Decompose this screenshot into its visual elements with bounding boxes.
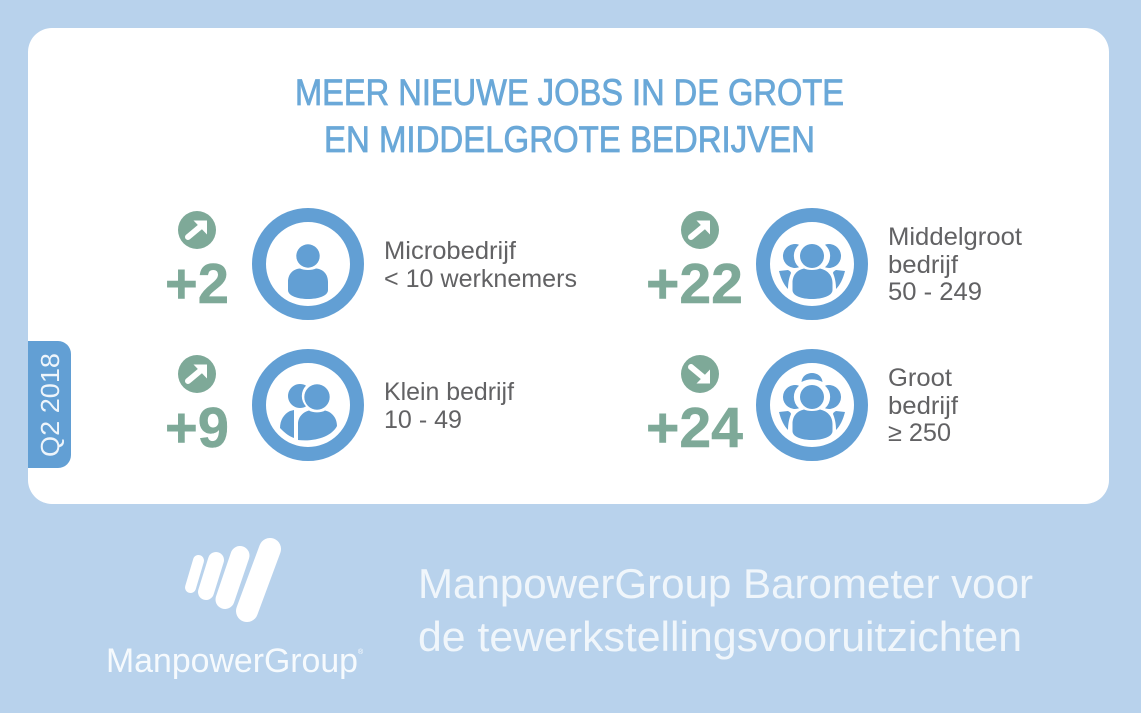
footer text: de tewerkstellingsvooruitzichten bbox=[418, 613, 1022, 660]
icon: logo bars bbox=[190, 549, 270, 611]
label: 10 - 49 bbox=[384, 406, 462, 434]
icon: up arrow badge bbox=[178, 355, 216, 393]
panel: Klein bedrijf bbox=[165, 355, 514, 460]
value: +9: +9 bbox=[165, 396, 229, 460]
icon: up arrow badge bbox=[681, 211, 719, 249]
panel: Microbedrijf bbox=[165, 211, 577, 316]
label: < 10 werknemers bbox=[384, 265, 577, 293]
label: Klein bedrijf bbox=[384, 378, 514, 406]
label: Microbedrijf bbox=[384, 237, 516, 265]
label bbox=[888, 364, 958, 447]
registered mark: ® bbox=[358, 648, 364, 656]
icon: group of people bbox=[763, 215, 861, 313]
title: MEER NIEUWE JOBS IN DE GROTE bbox=[295, 72, 844, 113]
logo wordmark: ManpowerGroup bbox=[106, 642, 358, 680]
label: 50 - 249 bbox=[888, 278, 982, 306]
value: +2: +2 bbox=[165, 252, 229, 316]
value: +24: +24 bbox=[646, 396, 743, 460]
icon: large group of people bbox=[763, 356, 861, 454]
panel: white card bbox=[28, 28, 1109, 504]
icon: two people bbox=[259, 356, 357, 454]
value: +22: +22 bbox=[646, 252, 743, 316]
footer text bbox=[418, 560, 1033, 660]
title bbox=[295, 72, 844, 160]
tab: Q2 2018: Q2 2018 bbox=[35, 353, 65, 457]
icon: down arrow badge bbox=[681, 355, 719, 393]
panel: Groot bedrijf bbox=[646, 355, 958, 460]
tab: Q2 2018 bbox=[28, 341, 71, 468]
label bbox=[384, 378, 514, 434]
icon: single person bbox=[259, 215, 357, 313]
label bbox=[888, 223, 1022, 306]
label bbox=[384, 237, 577, 293]
footer text: ManpowerGroup Barometer voor bbox=[418, 560, 1033, 607]
label: Middelgroot bbox=[888, 223, 1022, 251]
label: ≥ 250 bbox=[888, 419, 951, 447]
icon: up arrow badge bbox=[178, 211, 216, 249]
panel: Middelgroot bedrijf bbox=[646, 211, 1022, 316]
label: bedrijf bbox=[888, 251, 958, 279]
label: bedrijf bbox=[888, 392, 958, 420]
title: EN MIDDELGROTE BEDRIJVEN bbox=[324, 119, 815, 160]
label: Groot bbox=[888, 364, 952, 392]
logo: ManpowerGroup bbox=[106, 549, 364, 680]
